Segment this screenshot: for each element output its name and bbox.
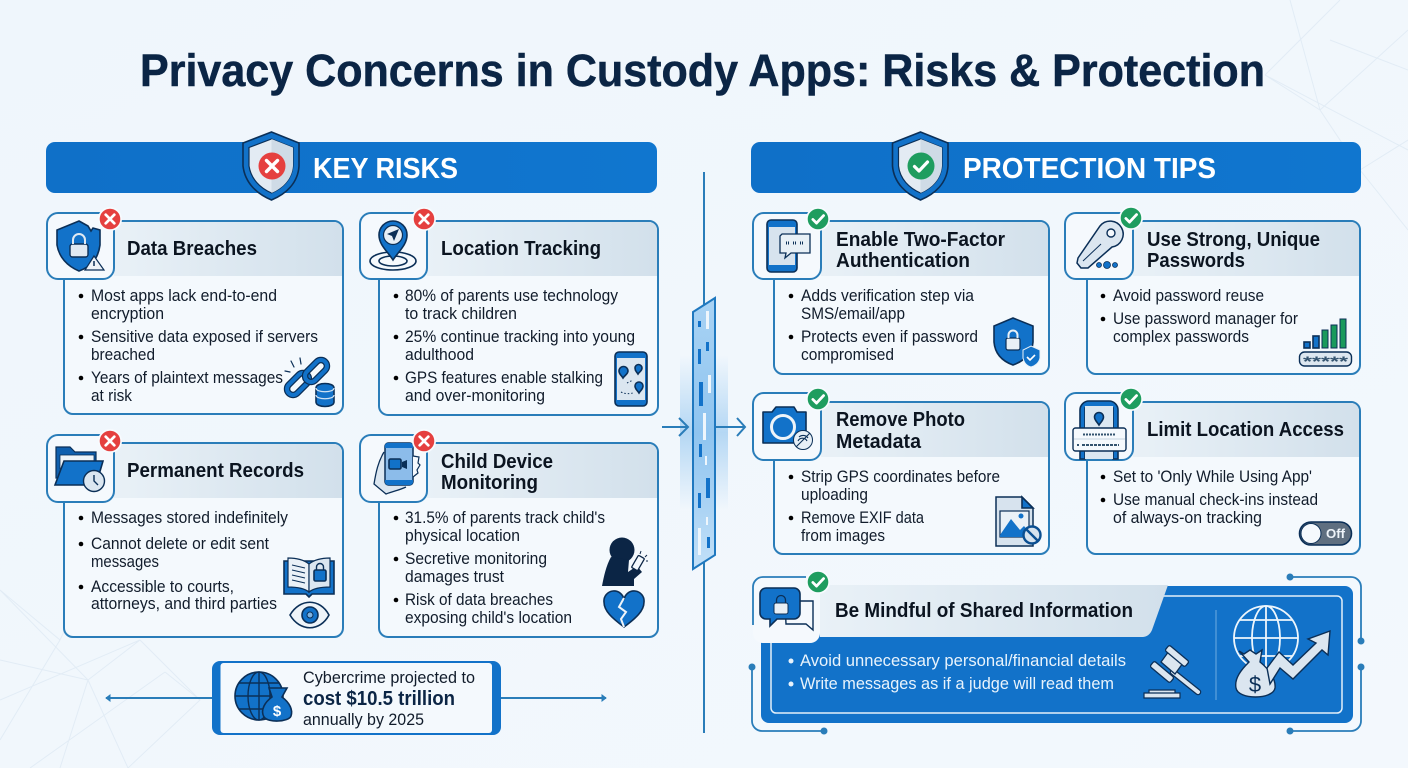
central divider with data prism <box>662 172 745 733</box>
badge: tip <box>807 571 829 593</box>
bullet list: physical location <box>405 527 520 545</box>
heading <box>836 409 965 453</box>
bullet list: complex passwords <box>1113 328 1249 346</box>
bullet list: uploading <box>801 486 868 504</box>
icon: image file with no symbol <box>996 497 1040 546</box>
icon: location pin with rings <box>370 221 416 270</box>
bullet list: Protects even if password <box>801 328 978 346</box>
bullet list: damages trust <box>405 568 504 586</box>
icon: key <box>1077 221 1123 268</box>
icon: broken heart <box>604 591 644 627</box>
icon: child silhouette with phone <box>602 538 648 586</box>
panel: permanent records <box>47 430 343 637</box>
bullet list: Years of plaintext messages <box>91 369 283 387</box>
bullet list <box>789 287 978 364</box>
heading: Be Mindful of Shared Information <box>835 600 1133 622</box>
bullet list: Accessible to courts, <box>91 578 234 596</box>
bullet list: to track children <box>405 305 517 323</box>
badge: tip <box>1120 207 1142 229</box>
panel: remove photo metadata <box>753 388 1049 554</box>
icon: globe and money bag <box>235 672 292 721</box>
icon: globe, money bag and growth arrow <box>1234 606 1330 697</box>
bullet list: breached <box>91 346 155 364</box>
badge: risk <box>413 208 435 230</box>
heading: Monitoring <box>441 472 538 494</box>
bullet list: messages <box>91 553 159 571</box>
bullet list <box>789 468 1000 545</box>
bullet list <box>1101 468 1318 527</box>
bullet list: of always-on tracking <box>1113 509 1262 527</box>
icon: camera with struck fingerprint <box>763 407 812 450</box>
heading: Child Device <box>441 451 553 473</box>
circuit traces <box>748 574 1364 734</box>
heading <box>836 229 1005 272</box>
heading: Authentication <box>836 250 970 272</box>
icon: phone with code bubble <box>767 220 810 272</box>
icon: globe, money bag and growth arrow: $ <box>1249 672 1261 697</box>
heading: Permanent Records <box>127 460 304 482</box>
section header: protection tips <box>751 132 1361 200</box>
panel: enable two-factor authentication <box>753 208 1049 374</box>
bullet list: exposing child's location <box>405 609 572 627</box>
heading <box>441 451 553 494</box>
icon: book with lock <box>284 558 334 597</box>
icon: broken chain and database <box>285 358 334 406</box>
icon: shield with lock and small check shield <box>994 318 1040 367</box>
bullet list: at risk <box>91 387 133 405</box>
bullet list <box>1101 287 1298 346</box>
icon: off toggle <box>1300 522 1352 545</box>
badge: risk <box>99 430 121 452</box>
stat text <box>303 669 475 729</box>
bullet list: 25% continue tracking into young <box>405 328 635 346</box>
bullet list: from images <box>801 527 885 545</box>
badge: tip <box>807 388 829 410</box>
bullet list: Sensitive data exposed if servers <box>91 328 318 346</box>
icon: folder with clock <box>55 447 104 492</box>
icon: phone with permission dialog <box>1073 401 1126 459</box>
callout: cybercrime cost <box>106 661 606 735</box>
badge: tip <box>807 208 829 230</box>
heading: Location Tracking <box>441 238 601 260</box>
bullet list: Write messages as if a judge will read them <box>800 674 1114 693</box>
bullet list: and over-monitoring <box>405 387 545 405</box>
icon: hand holding phone <box>374 443 420 494</box>
bullet list: Risk of data breaches <box>405 591 553 609</box>
icon: password strength bars: ***** <box>1303 353 1349 369</box>
icon: globe and money bag: $ <box>273 703 282 720</box>
title: Privacy Concerns in Custody Apps: Risks & Protection <box>140 45 1265 96</box>
icon: password strength bars <box>1300 319 1352 369</box>
badge: risk <box>413 430 435 452</box>
panel: data breaches <box>47 208 343 414</box>
icon: phone with map pins <box>615 352 647 406</box>
bullet list: Strip GPS coordinates before <box>801 468 1000 486</box>
icon: off toggle: Off <box>1326 527 1346 541</box>
heading: Remove Photo <box>836 409 965 431</box>
bullet list: Cannot delete or edit sent <box>91 535 269 553</box>
bullet list: Messages stored indefinitely <box>91 509 289 527</box>
arrow: left into prism <box>662 418 688 436</box>
icon: chat bubbles with lock <box>760 588 813 630</box>
heading: Enable Two-Factor <box>836 229 1005 251</box>
bullet list <box>79 509 289 613</box>
bullet list: Avoid password reuse <box>1113 287 1264 305</box>
bullet list: compromised <box>801 346 894 364</box>
icon: shield with green check <box>892 132 948 200</box>
bullet list: Most apps lack end-to-end <box>91 287 277 305</box>
bullet list <box>394 509 605 627</box>
bullet list: Set to 'Only While Using App' <box>1113 468 1312 486</box>
bullet list: Use manual check-ins instead <box>1113 491 1318 509</box>
bullet list: adulthood <box>405 346 474 364</box>
panel: location tracking <box>360 208 658 415</box>
icon: shield with red x <box>243 132 299 200</box>
heading: key risks: KEY RISKS <box>313 153 458 185</box>
panel: use strong unique passwords <box>1065 207 1360 374</box>
icon: gavel <box>1144 645 1198 698</box>
bullet list: Adds verification step via <box>801 287 975 305</box>
badge: risk <box>99 208 121 230</box>
bullet list: SMS/email/app <box>801 305 905 323</box>
heading: Data Breaches <box>127 238 257 260</box>
heading: Use Strong, Unique <box>1147 229 1320 251</box>
bullet list: 80% of parents use technology <box>405 287 619 305</box>
bullet list: Remove EXIF data <box>801 509 925 527</box>
prism <box>693 298 715 569</box>
bullet list: 31.5% of parents track child's <box>405 509 605 527</box>
icon: eye <box>290 602 329 628</box>
heading: Metadata <box>836 431 922 453</box>
heading: Limit Location Access <box>1147 419 1344 441</box>
bullet list: Avoid unnecessary personal/financial details <box>800 651 1126 670</box>
arrow: right out of prism <box>716 418 745 436</box>
stat text: annually by 2025 <box>303 711 424 729</box>
stat text: Cybercrime projected to <box>303 669 475 687</box>
bullet list: Secretive monitoring <box>405 550 547 568</box>
badge: tip <box>1120 388 1142 410</box>
icon: broken shield with lock <box>57 221 104 271</box>
heading: Passwords <box>1147 250 1245 272</box>
bullet list: attorneys, and third parties <box>91 595 277 613</box>
bullet list <box>788 651 1126 693</box>
stat text: cost $10.5 trillion <box>303 688 455 710</box>
heading: protection tips: PROTECTION TIPS <box>963 153 1216 185</box>
panel: child device monitoring <box>360 430 658 637</box>
section header: key risks <box>46 132 657 200</box>
bullet list: Use password manager for <box>1113 310 1298 328</box>
bullet list: encryption <box>91 305 164 323</box>
panel: limit location access <box>1065 388 1360 554</box>
heading <box>1147 229 1320 272</box>
panel: be mindful of shared information <box>748 571 1364 734</box>
bullet list <box>79 287 318 405</box>
bullet list <box>394 287 635 405</box>
bullet list: GPS features enable stalking <box>405 369 603 387</box>
